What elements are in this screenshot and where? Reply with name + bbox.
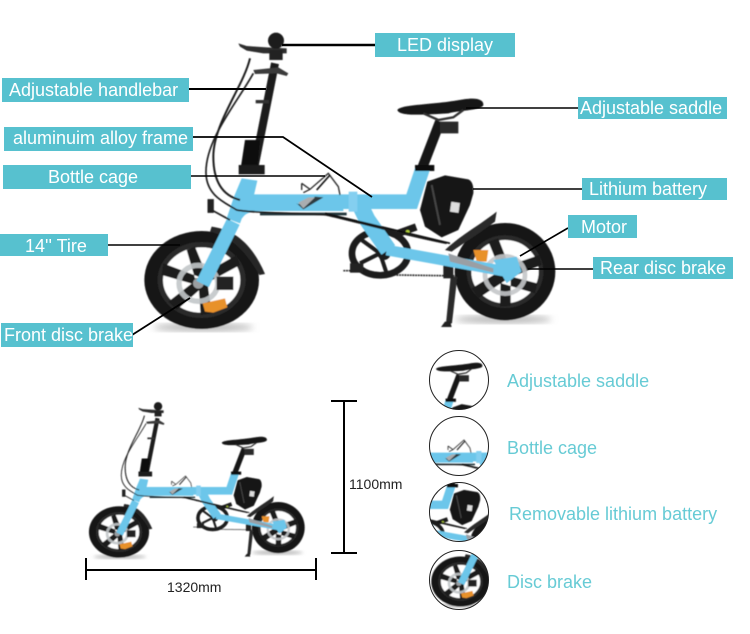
label: 14'' Tire bbox=[0, 234, 108, 256]
height value: 1100mm bbox=[349, 476, 402, 492]
callout line: adjustable handlebar bbox=[189, 88, 266, 90]
label: Bottle cage: Bottle cage bbox=[48, 167, 138, 187]
callout line: aluminium alloy frame bbox=[193, 137, 372, 197]
callout line: rear disc brake bbox=[528, 268, 593, 270]
feature icon: disc brake bbox=[429, 550, 489, 610]
callout line: bottle cage bbox=[191, 175, 325, 177]
label: Adjustable handlebar: Adjustable handlebar bbox=[9, 80, 178, 100]
callout line: motor bbox=[520, 228, 568, 256]
label: Motor: Motor bbox=[581, 217, 627, 237]
feature icon: saddle bbox=[429, 350, 489, 410]
main bike photo bbox=[144, 33, 555, 331]
label: Front disc brake: Front disc brake bbox=[4, 325, 133, 345]
callout line: adjustable saddle bbox=[466, 107, 578, 109]
feature icon: bottle cage bbox=[429, 416, 489, 476]
callout line: lithium battery bbox=[473, 188, 582, 190]
height dimension bbox=[331, 401, 357, 553]
label: 14'' Tire: 14'' Tire bbox=[25, 236, 87, 256]
feature text: Removable lithium battery: Removable lithium battery bbox=[509, 504, 717, 524]
width dimension bbox=[86, 558, 316, 580]
callout line: LED display bbox=[282, 44, 375, 46]
label: Rear disc brake: Rear disc brake bbox=[600, 258, 726, 278]
callout line: tire bbox=[108, 244, 180, 246]
feature text: Adjustable saddle: Adjustable saddle bbox=[507, 371, 649, 391]
label: Adjustable saddle: Adjustable saddle bbox=[580, 98, 722, 118]
label: LED display bbox=[375, 33, 515, 57]
label: Bottle cage bbox=[3, 165, 191, 189]
small bike photo bbox=[89, 402, 305, 559]
label: Lithium battery: Lithium battery bbox=[589, 179, 707, 199]
feature text: Bottle cage: Bottle cage bbox=[507, 438, 597, 458]
callout line: front disc brake bbox=[132, 298, 190, 335]
feature text: Disc brake: Disc brake bbox=[507, 572, 592, 592]
width value: 1320mm bbox=[167, 579, 221, 595]
label: LED display: LED display bbox=[397, 35, 493, 55]
label: aluminuim alloy frame: aluminuim alloy frame bbox=[13, 128, 188, 148]
feature icon: battery bbox=[429, 482, 489, 542]
label: Motor bbox=[568, 215, 637, 238]
